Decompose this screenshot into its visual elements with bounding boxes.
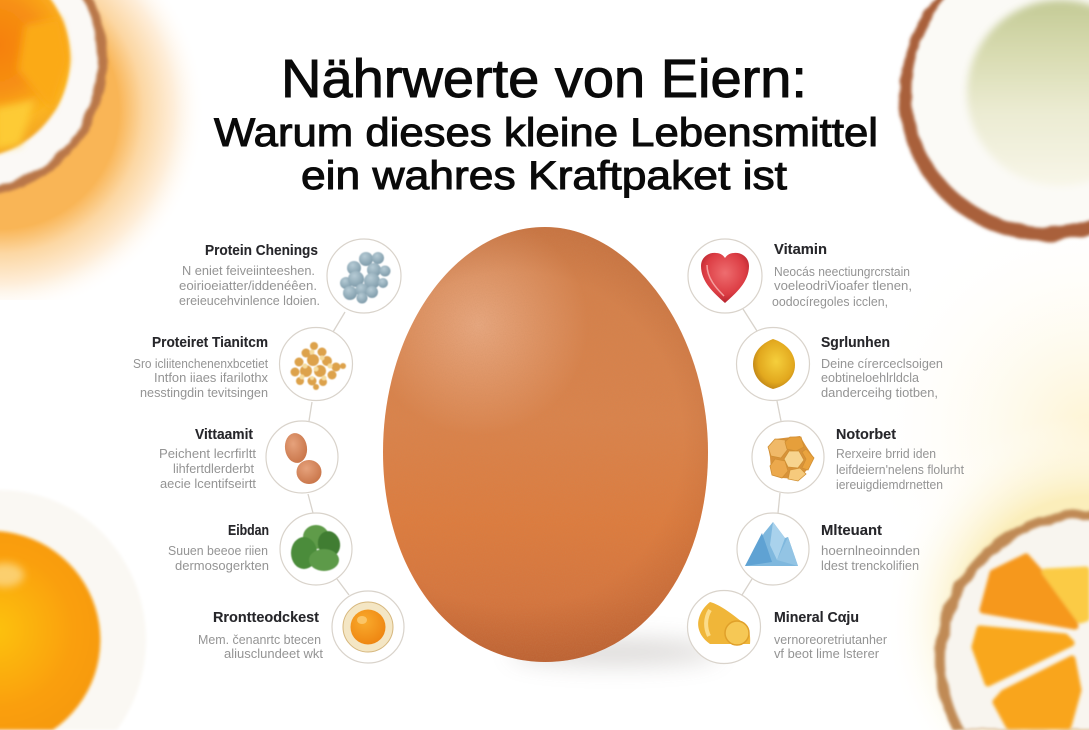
icon: red heart [688,239,762,313]
corner: orange in coconut, top left [0,0,107,197]
item: Protein Chenings [179,239,401,313]
corner: orange in coconut, bottom right [935,510,1089,730]
item: Proteiret Tianitcm [133,328,352,400]
description: dermosogerkten [175,559,269,573]
heading: Vitamin [774,242,827,258]
icon: molecule cluster [327,239,401,313]
description: Suuen beeoe riien [168,544,268,558]
description: iereuigdiemdrnetten [836,478,943,492]
icon: golden capsule [736,328,810,400]
item: Vitamin [688,239,912,313]
heading: Proteiret Tianitcm [152,335,268,351]
description: eobtineloehlrldcla [821,371,919,385]
icon: golden shell [688,590,760,664]
description: vernoreoretriutanher [774,633,887,647]
icon: honeycomb [752,421,824,493]
egg shadow [510,639,720,665]
icon: blue crystals [737,513,809,585]
description: aliusclundeet wkt [224,647,324,661]
description: Sro icliitenchenenxbcetiet [133,357,269,371]
heading: Mineral Cαju [774,610,859,626]
description: ldest trenckolifien [821,559,919,573]
description: nesstingdin tevitsingen [140,386,268,400]
title line 3: ein wahres Kraftpaket ist [301,154,787,198]
description: eoirioeiatter/iddenéêen. [179,279,317,293]
description: Peichent lecrfirltt [159,447,257,461]
item: Mineral Caju [688,590,887,664]
corner: fried egg, bottom left [0,490,146,730]
item: Sgrlunhen [736,328,943,400]
glow: top left [0,0,240,300]
heading: Protein Chenings [205,243,318,259]
description: leifdeiern'nelens flolurht [836,463,965,477]
heading: Vittaamit [195,427,253,443]
description: ereieucehvinlence ldoien. [179,294,320,308]
central egg [383,227,708,662]
icon: two eggs [266,421,338,493]
icon: egg yolk [332,591,404,663]
item: Notorbet [752,421,965,493]
description: lihfertdlerderbt [173,462,255,476]
description: Deine círerceclsoigen [821,357,943,371]
icon: green leaves [280,513,352,585]
description: hoernlneoinnden [821,544,920,558]
description [179,264,320,308]
heading: Mlteuant [821,523,882,539]
title line 1: Nährwerte von Eiern: [281,49,807,109]
description: voeleodriVioafer tlenen, [774,279,912,293]
description [198,633,324,661]
description [821,357,943,400]
description: N eniet feiveiinteeshen. [182,264,315,278]
item: Rrontteodckest [198,591,404,663]
title line 2: Warum dieses kleine Lebensmittel [214,111,878,155]
heading: Rrontteodckest [213,610,319,626]
corner: coconut half, top right [899,0,1089,241]
title [214,49,878,198]
heading: Eibdan [228,523,269,539]
description [133,357,269,400]
heading: Sgrlunhen [821,335,890,351]
description: vf beot lime lsterer [774,647,879,661]
description [821,544,920,573]
description [168,544,269,573]
description [772,265,912,309]
item: Mlteuant [737,513,920,585]
icon: golden grains [280,328,352,400]
item: Vittaamit [159,421,338,493]
heading: Notorbet [836,427,896,443]
description: Intfon iiaes ifarilothx [154,371,269,385]
description: Neocás neectiungrcrstain [774,265,910,279]
glow: right side [860,200,1089,660]
description: Mem. čenanrtc btecen [198,633,321,647]
description [836,447,965,492]
description: danderceihg tiotben, [821,386,938,400]
description [159,447,257,491]
item: Eibdan [168,513,352,585]
description: aecie lcentifseirtt [160,477,257,491]
description: oodocíregoles icclen, [772,295,888,309]
description: Rerxeire brrid iden [836,447,936,461]
glow: bottom right [884,415,1089,730]
description [774,633,887,661]
